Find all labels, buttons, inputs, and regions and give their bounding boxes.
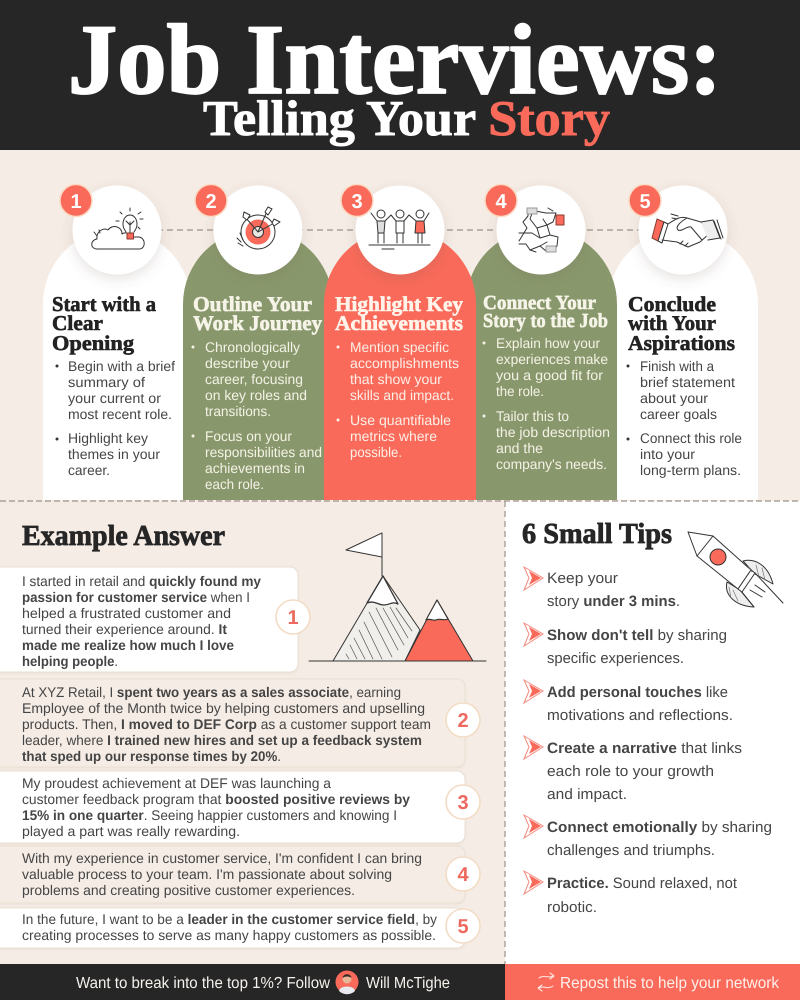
answer box 1: 1 [287,607,299,629]
tip 4: Create a narrative that links [547,740,742,757]
number badge 1: 1 [70,191,82,213]
footer right: repost call: Repost this to help your network [560,975,780,992]
icon: repost arrows [538,973,554,991]
card 1 bullets: summary of [68,374,145,390]
card 2 bullets [192,339,322,492]
step 1 circle [72,186,162,274]
card 5 bullets: Finish with a [640,358,714,374]
tip 5: Connect emotionally by sharing [547,819,772,836]
icon: arrow [524,871,543,894]
card 4 bullets: you a good fit for [496,367,603,383]
heading: example answer: Example Answer [22,520,225,552]
card 2 bullets: achievements in [205,460,305,476]
title: Job Interviews: [68,4,722,115]
step 4 circle [496,186,586,274]
card 1 text [52,292,175,478]
icon: rocket [688,532,783,607]
tip 1: story under 3 mins. [547,593,680,610]
answer box 5 [0,908,480,948]
card 2 bullets: career, focusing [205,371,303,387]
card 4 text [482,292,610,472]
card 1 bullets: career. [68,462,110,478]
icon: cloud and lightbulb [92,208,144,249]
card 3 heading: Achievements [335,311,463,335]
card 3 bullets: accomplishments [350,355,459,371]
answer 2 text: products. Then, I moved to DEF Corp as a customer support team [22,716,431,732]
dashed connector [117,229,683,231]
answer box 4 [0,846,480,903]
answer 2 text: leader, where I trained new hires and set up a feedback system [22,732,422,748]
card 3 bullets: possible. [350,444,402,460]
card 4 bullets: the role. [496,383,544,399]
card 3 bullets: Use quantifiable [350,412,451,428]
answer box 5: 5 [457,916,469,938]
answer box 4: 4 [457,864,469,886]
card 2 bullets: each role. [205,476,264,492]
card 2 bullets: responsibilities and [205,444,322,460]
card 2 heading: Work Journey [193,311,322,335]
number badge 2: 2 [205,191,217,213]
card 2 heading: Outline Your [193,292,312,316]
tip 1: Keep your [547,570,618,587]
tip 3 [524,680,733,724]
answer 2 text: that sped up our response times by 20%. [22,748,281,764]
card 4 bullets: the job description [496,424,610,440]
card 4 bullets: Tailor this to [496,408,569,424]
card 2 bullets: describe your [205,355,290,371]
tip 6 [524,871,738,916]
tip 5 [524,815,772,859]
answer 1 text: helped a frustrated customer and [22,605,231,621]
icon: arrow [524,567,543,590]
card 1 bullets: themes in your [68,446,160,462]
answer 1 text: passion for customer service when I [22,589,250,605]
number marker 5 [446,909,480,943]
card 1 bullets: Highlight key [68,430,148,446]
tip 4: each role to your growth [547,763,714,780]
card 5 bullets: into your [640,446,695,462]
answer 5 text: creating processes to serve as many happy customers as possible. [22,927,436,943]
card 2 bullets: on key roles and [205,387,307,403]
answer 3 text: My proudest achievement at DEF was launching a [22,775,331,791]
card 3 heading: Highlight Key [335,292,463,316]
tip 6: Practice. Sound relaxed, not [547,875,738,892]
card 4 heading: Story to the Job [483,310,608,332]
icon: four linked hands [519,208,564,252]
footer left: follow call [0,964,505,1000]
answer box 3: 3 [457,792,469,814]
card 1 heading: Clear [52,311,103,335]
card 1 bullets: your current or [68,390,161,406]
footer left: follow call: Will McTighe [366,975,450,992]
right tips panel background [505,501,800,964]
footer left: follow call: Want to break into the top 1%? Follow [76,975,330,992]
card 2 heading [193,292,322,335]
answer 4 text: problems and creating positive customer experiences. [22,882,355,898]
step 2 circle [214,186,302,274]
card 4 bullets: experiences make [496,351,608,367]
card 5 text [626,292,742,478]
card 1 bullets: Begin with a brief [68,358,175,374]
tip 2 [524,623,727,667]
card 1 heading [52,292,156,355]
subtitle: Telling Your Story [203,90,610,147]
illustration: mountains with flag [309,533,486,661]
card 5 shape: white [608,229,758,500]
step 5 circle [638,186,728,274]
answer 2 text: At XYZ Retail, I spent two years as a sales associate, earning [22,684,401,700]
card 3 bullets: Mention specific [350,339,449,355]
card 3 shape: coral [324,229,476,500]
card 4 heading: Connect Your [483,292,596,314]
card 4 bullets: and the [496,440,543,456]
card 1 shape: white [43,229,191,500]
card 1 heading: Start with a [52,292,156,316]
card 2 text [192,292,322,492]
number badge 4: 4 [495,191,507,213]
card 2 bullets: transitions. [205,403,271,419]
answer 1 text: turned their experience around. It [22,621,227,637]
answer 4 text: With my experience in customer service, I'm confident I can bring [22,850,422,866]
card 4 heading [483,292,608,332]
card 5 bullets: long-term plans. [640,462,741,478]
icon: handshake [652,214,723,247]
number badge 3: 3 [351,191,363,213]
answer 1 text: I started in retail and quickly found my [22,573,261,589]
avatar [336,970,358,994]
icon: arrow [524,680,543,703]
card 5 heading: with Your [628,311,716,335]
heading: 6 small tips: 6 Small Tips [522,518,672,550]
number badge 3 [341,184,373,216]
answer 4 text [22,850,422,898]
card 1 bullets: most recent role. [68,406,172,422]
answer box 2: 2 [457,710,469,732]
card 5 bullets [626,358,742,478]
card 4 bullets: Explain how your [496,335,600,351]
answer 1 text [22,573,261,669]
answer 3 text: customer feedback program that boosted positive reviews by [22,791,410,807]
card 3 bullets: that show your [350,371,442,387]
tip 4 [524,736,742,803]
number badge 2 [195,184,227,216]
icon: arrow [524,736,543,759]
answer 3 text: played a part was really rewarding. [22,823,240,839]
number marker 2 [446,703,480,737]
answer 1 text: helping people. [22,653,118,669]
card 1 heading: Opening [52,331,135,355]
answer 2 text [22,684,431,764]
card 3 text [335,292,463,460]
number badge 1 [60,184,92,216]
tip 6: robotic. [547,899,597,916]
card 5 heading [628,292,735,355]
number badge 4 [485,184,517,216]
number badge 5: 5 [639,191,651,213]
tip 4: and impact. [547,786,627,803]
icon: arrow [524,623,543,646]
tip 3: motivations and reflections. [547,707,733,724]
answer 3 text [22,775,410,839]
header band [0,0,800,150]
answer 4 text: valuable process to your team. I'm passionate about solving [22,866,392,882]
card 3 bullets: metrics where [350,428,437,444]
answer 2 text: Employee of the Month twice by helping customers and upselling [22,700,425,716]
answer box 3 [0,771,480,843]
answer 1 text: made me realize how much I love [22,637,234,653]
card 4 bullets [482,335,610,472]
step 3 circle [356,186,444,274]
card 2 bullets: Chronologically [205,339,300,355]
card 3 heading [335,292,463,335]
card 4 bullets: company's needs. [496,456,607,472]
card 5 bullets: brief statement [640,374,735,390]
number marker 1 [276,600,310,634]
card 2 bullets: Focus on your [205,428,292,444]
tip 2: Show don't tell by sharing [547,627,727,644]
icon: target with arrows [237,207,280,249]
icon: three raised-arm figures [369,210,430,249]
card 1 bullets [56,358,175,478]
number badge 5 [629,184,661,216]
tip 3: Add personal touches like [547,684,728,701]
card 3 bullets [336,339,459,460]
tip 5: challenges and triumphs. [547,842,715,859]
answer 5 text [22,911,437,943]
card 5 heading: Aspirations [628,331,735,355]
answer box 1 [0,567,310,672]
footer right: repost call [505,964,800,1000]
card 3 bullets: skills and impact. [350,387,454,403]
answer 5 text: In the future, I want to be a leader in the customer service field, by [22,911,437,927]
answer 3 text: 15% in one quarter. Seeing happier customers and knowing I [22,807,397,823]
number marker 4 [446,857,480,891]
answer box 2 [0,679,480,767]
card 5 heading: Conclude [628,292,716,316]
number marker 3 [446,785,480,819]
card 2 shape: green [183,229,333,500]
card 5 bullets: about your [640,390,708,406]
card 4 shape: green [466,229,617,500]
tip 2: specific experiences. [547,650,684,667]
card 5 bullets: career goals [640,406,717,422]
card 5 bullets: Connect this role [640,430,742,446]
icon: arrow [524,815,543,838]
tip 1 [524,567,680,610]
